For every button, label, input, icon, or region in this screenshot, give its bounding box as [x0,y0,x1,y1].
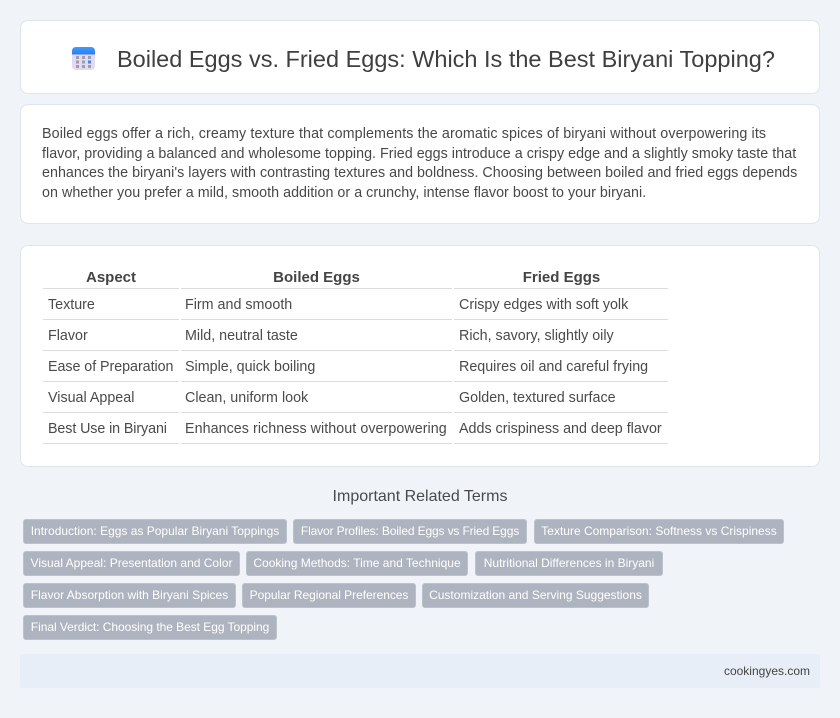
title: Boiled Eggs vs. Fried Eggs: Which Is the Best Biryani Topping? [117,46,775,72]
panel: intro [20,104,820,224]
text block: intro paragraph: on whether you prefer a mild, smooth addition or a crunchy, intense flavor boost to your biryani. [42,184,646,200]
comparison table: Simple, quick boiling [185,359,315,375]
text block: intro paragraph [42,126,797,200]
comparison table: Texture [48,297,95,313]
comparison table: Rich, savory, slightly oily [459,328,614,344]
table header: Fried Eggs [523,269,600,286]
comparison table: Ease of Preparation [48,359,173,375]
comparison table: Requires oil and careful frying [459,359,648,375]
comparison table: Visual Appeal [48,390,134,406]
related term tags [23,519,784,640]
comparison table [43,269,668,444]
footer [20,654,820,688]
related term tags: Flavor Absorption with Biryani Spices [31,588,228,602]
comparison table: Adds crispiness and deep flavor [459,421,662,437]
panel: title card [20,20,820,94]
comparison table: Enhances richness without overpowering [185,421,447,437]
comparison table: Best Use in Biryani [48,421,167,437]
panel: comparison table [20,245,820,467]
table header [86,269,600,286]
related term tags: Final Verdict: Choosing the Best Egg Topping [31,620,269,634]
related term tags: Cooking Methods: Time and Technique [253,556,461,570]
table header: Aspect [86,269,136,286]
related term tags: Visual Appeal: Presentation and Color [31,556,232,570]
icon: calendar [72,47,95,70]
related term tags: Texture Comparison: Softness vs Crispiness [541,524,777,538]
text block: intro paragraph: flavor, providing a balanced and wholesome topping. Fried eggs introduce a crispy edge and a slightly smoky taste that [42,146,796,162]
text block: intro paragraph: enhances the biryani's layers with contrasting textures and boldness. Choosing between boiled and fried eggs depends [42,165,797,181]
comparison table: Mild, neutral taste [185,328,298,344]
comparison table: Firm and smooth [185,297,292,313]
table header: Boiled Eggs [273,269,360,286]
comparison table: Flavor [48,328,88,344]
related term tags: Nutritional Differences in Biryani [484,556,654,570]
related term tags: Introduction: Eggs as Popular Biryani Toppings [31,524,279,538]
comparison table: Golden, textured surface [459,390,616,406]
related term tags: Customization and Serving Suggestions [429,588,642,602]
comparison table: Crispy edges with soft yolk [459,297,628,313]
footer credit: cookingyes.com [724,664,810,678]
text block: intro paragraph: Boiled eggs offer a rich, creamy texture that complements the aromatic spices of biryani without overpowering its [42,126,766,142]
comparison table: Clean, uniform look [185,390,308,406]
heading: related terms: Important Related Terms [333,488,507,505]
related term tags: Popular Regional Preferences [250,588,408,602]
related term tags: Flavor Profiles: Boiled Eggs vs Fried Eggs [301,524,519,538]
